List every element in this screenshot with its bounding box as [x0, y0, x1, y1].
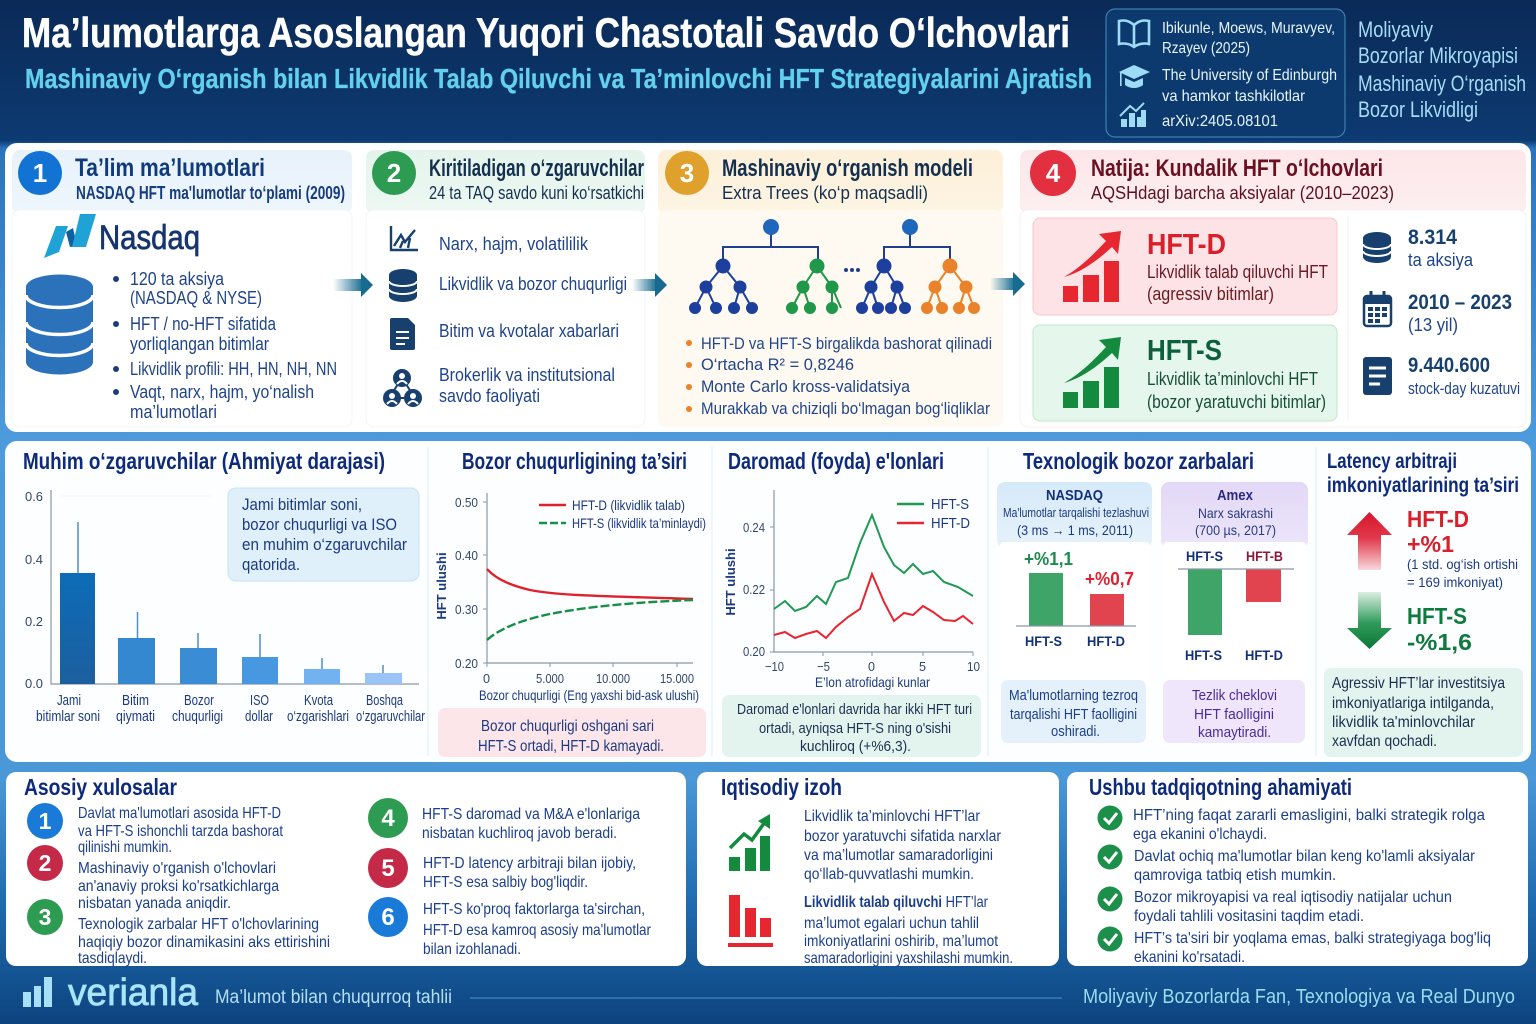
- stat: years: (13 yil): [1408, 315, 1458, 335]
- subheading: Extra Trees (ko‘p maqsadli): [722, 183, 928, 203]
- source info box: The University of Edinburgh: [1162, 67, 1337, 84]
- heading: Ta’lim ma’lumotlari: [75, 154, 265, 182]
- data bullets: [113, 269, 337, 422]
- card: Amex: HFT-B: [1246, 548, 1283, 564]
- importance text: ega ekanini o'lchaydi.: [1133, 826, 1267, 843]
- card: HFT-D: HFT-D: [1147, 229, 1226, 261]
- panel: earnings announcements: [722, 448, 981, 757]
- icon: database: [389, 269, 417, 302]
- card: HFT-D: Likvidlik talab qiluvchi HFT: [1147, 262, 1328, 282]
- HFT-S value: HFT-S: [1407, 603, 1467, 629]
- card: HFT-D: [1033, 218, 1337, 315]
- interpretation text: Likvidlik ta’minlovchi HFT’lar: [804, 808, 981, 825]
- panel: market depth: [434, 448, 706, 757]
- HFT-D value: +%1: [1407, 531, 1454, 557]
- model bullets: O‘rtacha R² = 0,8246: [701, 355, 854, 374]
- callout: Jami bitimlar soni,: [242, 495, 362, 514]
- badges: 2: [39, 850, 51, 876]
- model bullets: [686, 334, 992, 418]
- card: HFT-S: [1033, 325, 1337, 421]
- bar chart: 0.6: [25, 489, 43, 504]
- heading: Asosiy xulosalar: [24, 774, 177, 800]
- icon: people network: [383, 369, 422, 407]
- icon: database: [26, 275, 93, 374]
- takeaways text: HFT-S daromad va M&A e'lonlariga: [422, 806, 640, 823]
- subheading: 24 ta TAQ savdo kuni ko‘rsatkichi: [429, 183, 644, 203]
- panel: tech shocks: [997, 448, 1308, 743]
- card: Amex: HFT-D: [1245, 647, 1283, 663]
- callout: qatorida.: [242, 555, 300, 574]
- note: [438, 708, 706, 757]
- data bullets: Vaqt, narx, hajm, yo‘nalish: [130, 382, 314, 402]
- panel: analysis charts: [5, 441, 1531, 762]
- line chart: HFT-D: [931, 515, 970, 532]
- bar chart: Bitim: [122, 692, 149, 709]
- card: Amex: HFT-S: [1186, 548, 1223, 564]
- topic keywords: Bozor Likvidligi: [1358, 97, 1478, 122]
- callout: [228, 488, 419, 581]
- line chart: E’lon atrofidagi kunlar: [815, 674, 930, 690]
- badge 2: [372, 151, 416, 195]
- takeaways text: Texnologik zarbalar HFT o'lchovlarining: [78, 916, 319, 933]
- data bullets: HFT / no-HFT sifatida: [130, 314, 277, 334]
- line chart: HFT-S (likvidlik ta’minlaydi): [572, 515, 706, 531]
- card: HFT-S: HFT-S: [1147, 335, 1222, 367]
- bar chart: Kvota: [304, 692, 333, 709]
- panel: why this research matters: [1067, 772, 1528, 966]
- takeaways text: tasdiqlaydi.: [78, 950, 147, 967]
- heading: [1327, 450, 1519, 497]
- badge 1: 1: [33, 158, 47, 188]
- icon: chart: [391, 226, 418, 250]
- data bullets: 120 ta aksiya: [130, 269, 225, 289]
- decision trees: [690, 219, 979, 313]
- panel: key takeaways: [6, 772, 686, 967]
- note: [1324, 668, 1523, 757]
- card: Amex: HFT faolligini: [1194, 706, 1274, 723]
- heading: Bozor chuqurligining ta’siri: [462, 448, 687, 474]
- stat: stocks: ta aksiya: [1408, 250, 1474, 270]
- line chart: 0.40: [455, 548, 478, 563]
- subheading: AQSHdagi barcha aksiyalar (2010–2023): [1091, 183, 1394, 203]
- card: NASDAQ: +%1,1: [1024, 549, 1073, 569]
- card: Amex: HFT-S: [1185, 647, 1222, 663]
- data bullets: Likvidlik profili: HH, HN, NH, NN: [130, 359, 337, 379]
- takeaways text: an'anaviy proksi ko'rsatkichlarga: [78, 878, 279, 895]
- callout: en muhim o‘zgaruvchilar: [242, 535, 407, 554]
- card: HFT-S: (bozor yaratuvchi bitimlar): [1147, 392, 1326, 412]
- source info box: [1106, 9, 1345, 137]
- importance text: foydali tahlili vositasini taqdim etadi.: [1134, 908, 1364, 925]
- source info box: arXiv:2405.08101: [1162, 113, 1278, 130]
- panel: input variables: [366, 150, 645, 427]
- line chart: −5: [817, 659, 830, 674]
- logo bars: [23, 977, 52, 1007]
- bar chart: dollar: [245, 708, 273, 725]
- HFT-D value: [1407, 506, 1518, 590]
- line chart: 10.000: [596, 671, 630, 686]
- icon: document: [390, 318, 415, 350]
- heading: Daromad (foyda) e'lonlari: [728, 448, 944, 474]
- panel: latency arbitrage: [1324, 450, 1523, 757]
- badges: 6: [381, 904, 395, 931]
- line chart: 15.000: [660, 671, 694, 686]
- line chart: [434, 493, 706, 703]
- topic keywords: Moliyaviy: [1358, 17, 1433, 42]
- tagline: Ma’lumot bilan chuqurroq tahlii: [215, 987, 452, 1008]
- icon: red chart: [728, 895, 773, 947]
- source info box: Rzayev (2025): [1162, 40, 1250, 57]
- line chart: 0.22: [743, 582, 765, 597]
- arrow down: [1347, 592, 1392, 649]
- line chart: HFT ulushi: [434, 552, 449, 620]
- card: NASDAQ: HFT-S: [1025, 633, 1062, 649]
- bar chart: [25, 489, 425, 725]
- line chart: 10: [967, 659, 980, 674]
- variables list: Brokerlik va institutsional: [439, 365, 615, 385]
- line chart: 0.50: [455, 495, 478, 510]
- stat: years: 2010 – 2023: [1408, 291, 1512, 314]
- card: NASDAQ: tarqalishi HFT faolligini: [1010, 706, 1137, 723]
- badge 3: [665, 151, 709, 195]
- note: Agressiv HFT’lar investitsiya: [1332, 675, 1505, 692]
- heading: Natija: Kundalik HFT o‘lchovlari: [1091, 155, 1383, 182]
- source info box: va hamkor tashkilotlar: [1162, 88, 1306, 105]
- importance text: Bozor mikroyapisi va real iqtisodiy natijalar uchun: [1134, 889, 1452, 906]
- panel: result: [1020, 150, 1526, 427]
- stat: stocks: 8.314: [1408, 226, 1457, 249]
- bar chart: o‘zgaruvchilar: [356, 708, 425, 725]
- badge 4: 4: [1046, 158, 1061, 188]
- line chart: 0.30: [455, 602, 478, 617]
- bar chart: chuqurligi: [172, 708, 223, 725]
- line chart: 5.000: [536, 671, 564, 686]
- variables list: [439, 234, 627, 406]
- takeaways text: HFT-S esa salbiy bog'liqdir.: [423, 874, 588, 891]
- heading: Kiritiladigan o‘zgaruvchilar: [429, 155, 644, 182]
- stat: observations: 9.440.600: [1408, 354, 1490, 377]
- card: NASDAQ: oshiradi.: [1051, 723, 1100, 740]
- icon: growth chart: [1120, 103, 1146, 127]
- model bullets: Murakkab va chiziqli bo‘lmagan bog‘liqliklar: [701, 399, 990, 418]
- interpretation text: va ma’lumotlar samaradorligini: [804, 847, 993, 864]
- HFT-S value: -%1,6: [1407, 629, 1472, 655]
- takeaways text: HFT-D esa kamroq asosiy ma'lumotlar: [423, 922, 652, 939]
- takeaways text: va HFT-S ishonchli tarzda bashorat: [78, 823, 283, 840]
- note: imkoniyatlariga intilganda,: [1332, 695, 1494, 712]
- card: NASDAQ: [997, 482, 1152, 743]
- line chart: HFT-S: [931, 496, 969, 513]
- bar chart: qiymati: [116, 708, 155, 725]
- HFT-D value: = 169 imkoniyat): [1407, 574, 1503, 590]
- takeaways text: haqiqiy bozor dinamikasini aks ettirishini: [78, 934, 330, 951]
- variables list: savdo faoliyati: [439, 386, 540, 406]
- variables list: Bitim va kvotalar xabarlari: [439, 321, 619, 341]
- badges: 3: [39, 904, 51, 930]
- check icons: [1098, 806, 1122, 952]
- arrow: data to inputs: [333, 273, 373, 297]
- importance text: [1133, 807, 1491, 966]
- line chart: Bozor chuqurligi (Eng yaxshi bid-ask ulushi): [479, 687, 699, 703]
- importance text: Davlat ochiq ma'lumotlar bilan keng ko'lamli aksiyalar: [1134, 848, 1476, 865]
- data bullets: yorliqlangan bitimlar: [130, 334, 269, 354]
- arrow: inputs to model: [632, 273, 667, 297]
- line chart: 0.20: [743, 644, 765, 659]
- data bullets: (NASDAQ & NYSE): [130, 288, 262, 308]
- stat: years: [1364, 291, 1512, 335]
- takeaways text: nisbatan kuchliroq javob beradi.: [422, 825, 617, 842]
- takeaways text: qilinishi mumkin.: [78, 839, 172, 856]
- note: likvidlik ta'minlovchilar: [1332, 714, 1476, 731]
- icon: green chart: [729, 814, 770, 871]
- importance text: HFT’s ta'siri bir yoqlama emas, balki strategiyaga bog'liq: [1134, 930, 1491, 947]
- card: Amex: (700 µs, 2017): [1195, 522, 1276, 538]
- icon: book: [1119, 20, 1149, 47]
- line chart: −10: [765, 659, 784, 674]
- card: HFT-S: Likvidlik ta’minlovchi HFT: [1147, 369, 1318, 389]
- bar chart: Bozor: [184, 692, 214, 709]
- panel: pipeline: [5, 143, 1531, 432]
- line chart: 0.20: [455, 656, 478, 671]
- takeaways text: bilan izohlanadi.: [423, 941, 521, 958]
- heading: Texnologik bozor zarbalari: [1023, 448, 1254, 474]
- card: Amex: [1161, 482, 1308, 743]
- card: Amex: Tezlik cheklovi: [1192, 687, 1277, 704]
- panel: feature importance: [23, 448, 425, 725]
- takeaways text: HFT-D latency arbitraji bilan ijobiy,: [423, 855, 636, 872]
- arrow up: [1347, 512, 1392, 570]
- heading: Iqtisodiy izoh: [721, 774, 842, 800]
- data bullets: ma’lumotlari: [130, 402, 217, 422]
- topic keywords: [1358, 17, 1526, 122]
- note: HFT-S ortadi, HFT-D kamayadi.: [478, 738, 664, 755]
- card: Amex: kamaytiradi.: [1198, 724, 1271, 741]
- card: Amex: Amex: [1217, 487, 1254, 504]
- icon: green growth bars: [1063, 337, 1121, 408]
- heading: Mashinaviy o‘rganish modeli: [722, 155, 973, 182]
- bar chart: 0.0: [25, 676, 43, 691]
- line chart: HFT ulushi: [723, 548, 738, 616]
- heading: Muhim o‘zgaruvchilar (Ahmiyat darajasi): [23, 448, 385, 474]
- interpretation text: qo‘llab-quvvatlashi mumkin.: [804, 866, 974, 883]
- source info box: Ibikunle, Moews, Muravyev,: [1162, 20, 1335, 37]
- interpretation text: samaradorligini yaxshilashi mumkin.: [804, 950, 1013, 967]
- badges: 1: [39, 808, 52, 834]
- badge 3: 3: [680, 158, 694, 188]
- badge 4: [1030, 150, 1076, 196]
- subheading: NASDAQ HFT ma'lumotlar to‘plami (2009): [76, 183, 345, 203]
- takeaways text: HFT-S ko'proq faktorlarga ta'sirchan,: [423, 901, 645, 918]
- takeaways text: Mashinaviy o'rganish o'lchovlari: [78, 860, 276, 877]
- variables list: Narx, hajm, volatililik: [439, 234, 589, 254]
- takeaways text: [78, 805, 652, 967]
- heading: Ushbu tadqiqotning ahamiyati: [1089, 774, 1352, 800]
- interpretation text: bozor yaratuvchi sifatida narxlar: [804, 828, 1002, 845]
- line chart: 5: [919, 659, 926, 674]
- card: Amex: Narx sakrashi: [1198, 505, 1273, 521]
- badges: [27, 798, 408, 937]
- importance text: HFT’ning faqat zararli emasligini, balki strategik rolga: [1133, 807, 1485, 824]
- bar chart: Jami: [57, 692, 81, 709]
- bar chart: o‘zgarishlari: [287, 708, 349, 725]
- takeaways text: nisbatan yanada aniqdir.: [78, 895, 231, 912]
- nasdaq logo: Nasdaq: [99, 219, 200, 257]
- line chart: HFT-D (likvidlik talab): [572, 497, 685, 513]
- subtitle: Mashinaviy O‘rganish bilan Likvidlik Talab Qiluvchi va Ta’minlovchi HFT Strategiyalarini Ajratish: [25, 63, 1092, 94]
- importance text: ekanini ko'rsatadi.: [1134, 949, 1245, 966]
- badge 2: 2: [387, 158, 401, 188]
- model bullets: Monte Carlo kross-validatsiya: [701, 377, 911, 396]
- HFT-D value: (1 std. og‘ish ortishi: [1407, 556, 1518, 572]
- importance text: qamroviga tatbiq etish mumkin.: [1134, 867, 1336, 884]
- panel: training data: [12, 150, 352, 427]
- interpretation text: [804, 808, 1013, 967]
- header: [22, 9, 1526, 137]
- interpretation text: ma’lumot egalari uchun tahlil: [804, 915, 979, 932]
- card: NASDAQ: +%0,7: [1085, 569, 1134, 589]
- line chart: 0.24: [743, 520, 765, 535]
- arrow: model to result: [990, 272, 1025, 296]
- logo wordmark: verianla: [68, 972, 199, 1014]
- line chart: 0: [483, 671, 490, 686]
- badge 1: [18, 151, 62, 195]
- stat: observations: [1363, 354, 1520, 398]
- panel: economic interpretation: [697, 772, 1059, 967]
- note: xavfdan qochadi.: [1332, 733, 1437, 750]
- badges: 4: [381, 805, 395, 832]
- card: NASDAQ: HFT-D: [1087, 633, 1125, 649]
- line chart: 0: [868, 659, 875, 674]
- bar chart: 0.4: [25, 552, 43, 567]
- card: HFT-D: (agressiv bitimlar): [1147, 284, 1274, 304]
- HFT-D value: HFT-D: [1407, 506, 1469, 532]
- footer: [23, 972, 1515, 1014]
- nasdaq logo: [44, 214, 200, 258]
- card: NASDAQ: Ma'lumotlarning tezroq: [1009, 687, 1138, 704]
- note: kuchliroq (+%6,3).: [800, 738, 911, 755]
- note: Daromad e'lonlari davrida har ikki HFT turi: [737, 701, 972, 718]
- bar chart: Boshqa: [366, 692, 403, 709]
- note: Bozor chuqurligi oshgani sari: [481, 718, 654, 735]
- card: NASDAQ: Ma'lumotlar tarqalishi tezlashuvi: [1003, 505, 1149, 520]
- stat: stocks: [1363, 226, 1474, 270]
- note: [722, 695, 981, 757]
- card: NASDAQ: (3 ms → 1 ms, 2011): [1017, 522, 1133, 538]
- bar chart: 0.2: [25, 614, 43, 629]
- interpretation text: imkoniyatlarini oshirib, ma’lumot: [804, 933, 998, 950]
- icon: graduation cap: [1119, 65, 1150, 88]
- icon: red growth bars: [1063, 231, 1121, 302]
- heading: Latency arbitraji: [1327, 450, 1457, 473]
- panel: ml model: [658, 150, 1003, 427]
- bar chart: ISO: [250, 692, 269, 709]
- badges: 5: [381, 855, 395, 882]
- card: NASDAQ: NASDAQ: [1046, 487, 1103, 504]
- callout: bozor chuqurligi va ISO: [242, 515, 397, 534]
- variables list: Likvidlik va bozor chuqurligi: [439, 274, 627, 294]
- bar chart: bitimlar soni: [36, 708, 100, 725]
- HFT-S value: [1407, 603, 1472, 655]
- line chart: [723, 490, 980, 690]
- takeaways text: Davlat ma'lumotlari asosida HFT-D: [78, 805, 281, 822]
- title: Ma’lumotlarga Asoslangan Yuqori Chastotali Savdo O‘lchovlari: [22, 9, 1070, 56]
- model bullets: HFT-D va HFT-S birgalikda bashorat qilinadi: [701, 334, 992, 353]
- interpretation text: Likvidlik talab qiluvchi HFT’lar: [804, 894, 989, 911]
- note: ortadi, ayniqsa HFT-S ning o'sishi: [759, 720, 951, 737]
